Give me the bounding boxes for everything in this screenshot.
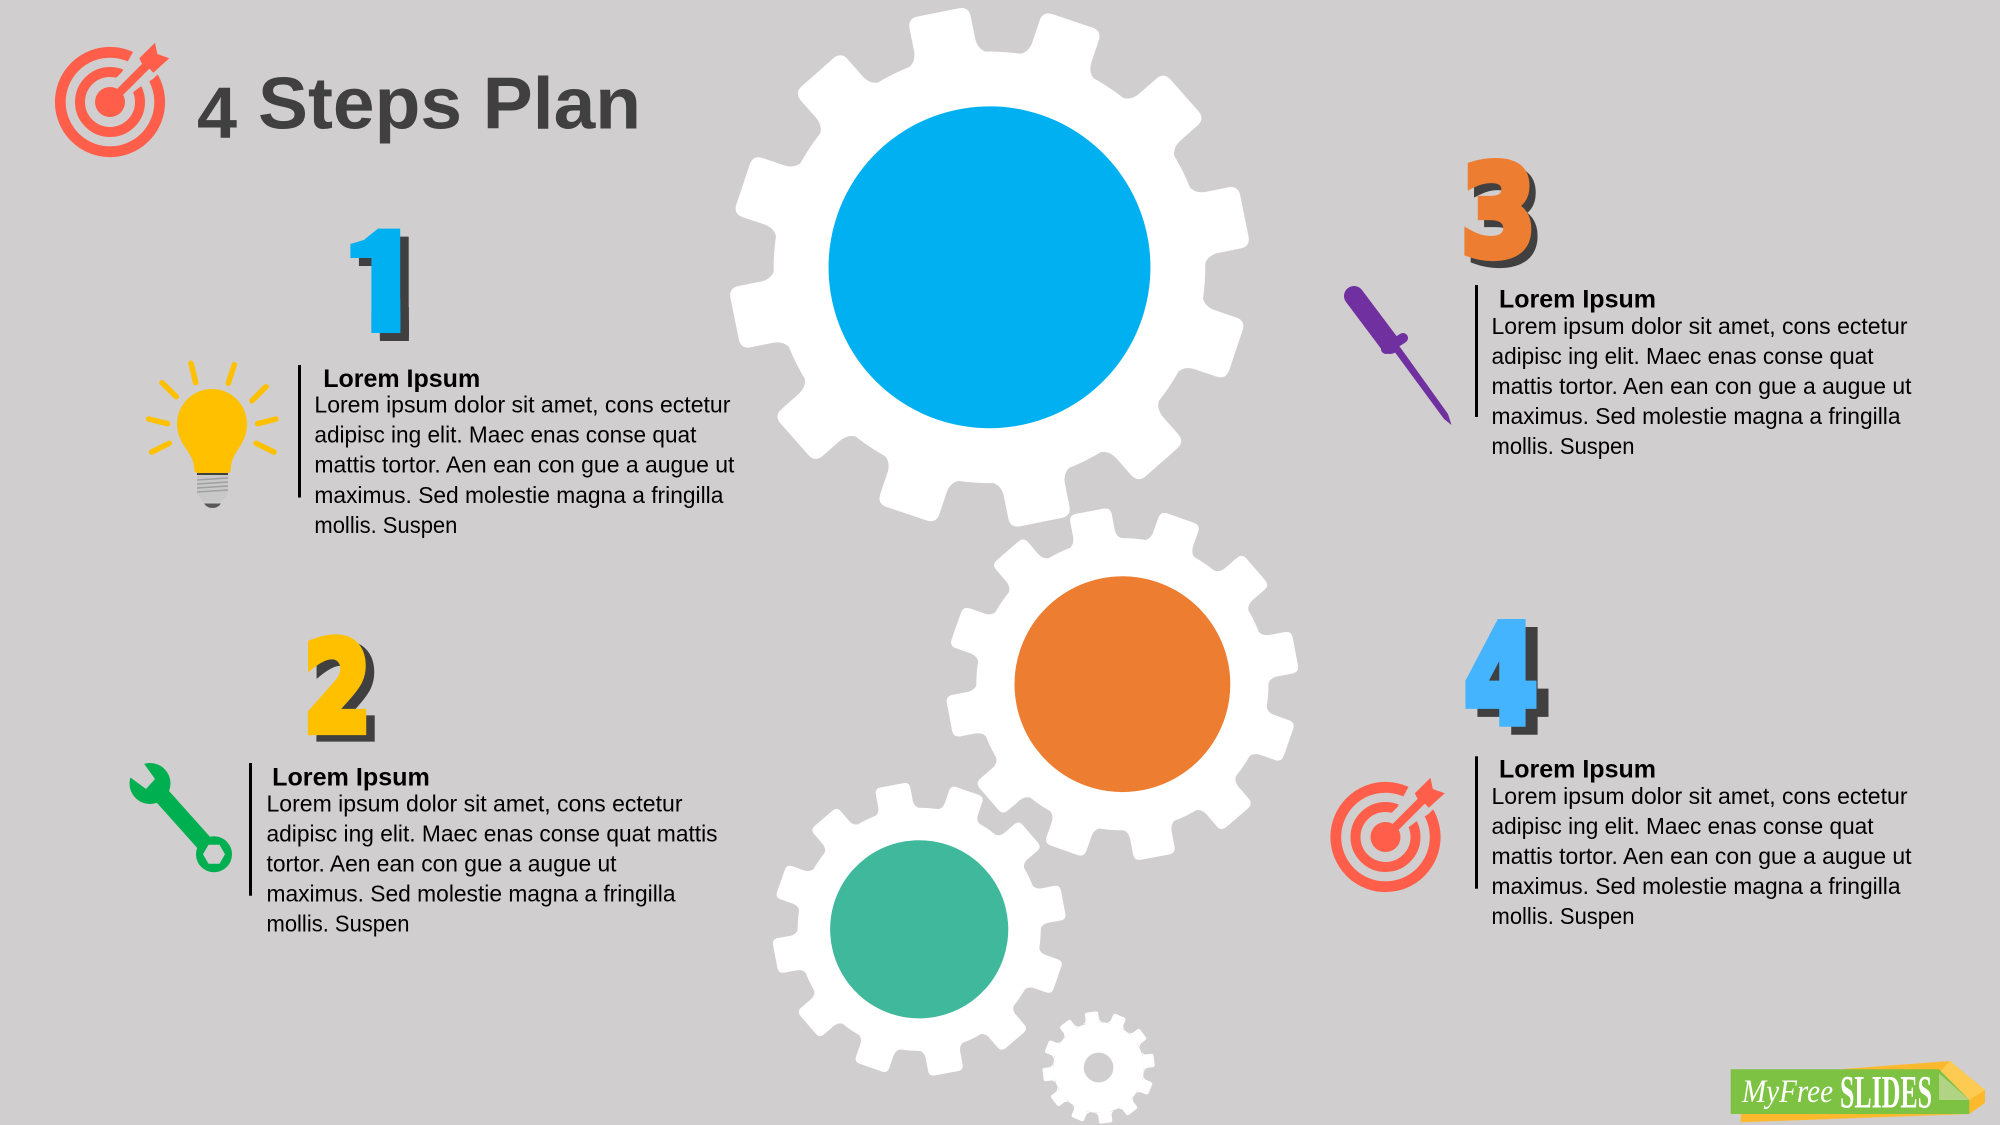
text block 1: Lorem Ipsum bbox=[323, 365, 480, 393]
text block 1: Lorem ipsum dolor sit amet, cons ectetur bbox=[314, 392, 731, 418]
text block 4: Lorem Ipsum bbox=[1499, 756, 1656, 784]
numeral 4: 4 bbox=[1477, 606, 1549, 762]
text block 3: mollis. Suspen bbox=[1492, 433, 1634, 459]
text block 3: adipisc ing elit. Maec enas conse quat bbox=[1492, 343, 1874, 369]
panel: step 1 bbox=[149, 206, 735, 538]
text block 3: maximus. Sed molestie magna a fringilla bbox=[1492, 403, 1901, 429]
numeral 3: 3 bbox=[1468, 148, 1542, 291]
divider bar bbox=[1475, 285, 1478, 417]
text block 2: Lorem ipsum dolor sit amet, cons ectetur bbox=[266, 791, 683, 817]
panel: step 4 bbox=[1336, 598, 1912, 929]
title: Steps Plan bbox=[258, 64, 641, 145]
gear: green bbox=[733, 743, 1106, 1116]
numeral 1: 1 bbox=[346, 206, 414, 362]
text block 1: maximus. Sed molestie magna a fringilla bbox=[314, 482, 724, 508]
text block 4: Lorem ipsum dolor sit amet, cons ectetur bbox=[1492, 783, 1908, 809]
icon: title target bbox=[60, 38, 172, 152]
numeral 1: 1 bbox=[355, 214, 422, 370]
text block 2: Lorem Ipsum bbox=[272, 764, 430, 792]
logo: MyFreeSlides: MyFree bbox=[1741, 1074, 1833, 1110]
text block 3 bbox=[1492, 286, 1912, 459]
text block 2: maximus. Sed molestie magna a fringilla bbox=[266, 881, 676, 907]
text block 4: mollis. Suspen bbox=[1492, 903, 1634, 929]
icon: screwdriver bbox=[1354, 296, 1452, 425]
text block 1: mattis tortor. Aen ean con gue a augue ut bbox=[314, 452, 735, 478]
logo: MyFreeSlides bbox=[1731, 1061, 1985, 1122]
text block 3: Lorem ipsum dolor sit amet, cons ectetur bbox=[1492, 313, 1908, 339]
icon: light bulb bbox=[149, 363, 276, 508]
text block 1: adipisc ing elit. Maec enas conse quat bbox=[314, 422, 697, 448]
text block 4 bbox=[1492, 756, 1912, 929]
numeral 2: 2 bbox=[304, 617, 371, 760]
text block 4: adipisc ing elit. Maec enas conse quat bbox=[1492, 813, 1874, 839]
divider bar bbox=[249, 763, 252, 896]
numeral 3: 3 bbox=[1461, 141, 1536, 285]
text block 1: mollis. Suspen bbox=[314, 512, 457, 538]
gear: medium orange bbox=[898, 460, 1347, 908]
divider bar bbox=[298, 365, 301, 498]
text block 3: mattis tortor. Aen ean con gue a augue ut bbox=[1492, 373, 1912, 399]
text block 4: mattis tortor. Aen ean con gue a augue ut bbox=[1492, 843, 1912, 869]
text block 2 bbox=[266, 764, 718, 937]
panel: step 2 bbox=[123, 617, 718, 937]
text block 1 bbox=[314, 365, 735, 538]
text block 2: mollis. Suspen bbox=[266, 911, 410, 937]
icon: step 4 target bbox=[1336, 773, 1448, 887]
numeral 1 bbox=[350, 228, 409, 341]
numeral 4: 4 bbox=[1465, 598, 1537, 754]
text block 2: tortor. Aen ean con gue a augue ut bbox=[266, 851, 617, 877]
icon: wrench bbox=[123, 758, 232, 872]
title: 4 bbox=[197, 74, 237, 154]
text block 3: Lorem Ipsum bbox=[1499, 286, 1656, 314]
text block 4: maximus. Sed molestie magna a fringilla bbox=[1492, 873, 1901, 899]
divider bar bbox=[1475, 756, 1478, 889]
text block 2: adipisc ing elit. Maec enas conse quat mattis bbox=[266, 821, 718, 847]
numeral 2: 2 bbox=[312, 624, 379, 767]
gear: small white bbox=[1025, 994, 1172, 1125]
gear: large blue bbox=[660, 0, 1319, 597]
panel: step 3 bbox=[1354, 141, 1912, 459]
